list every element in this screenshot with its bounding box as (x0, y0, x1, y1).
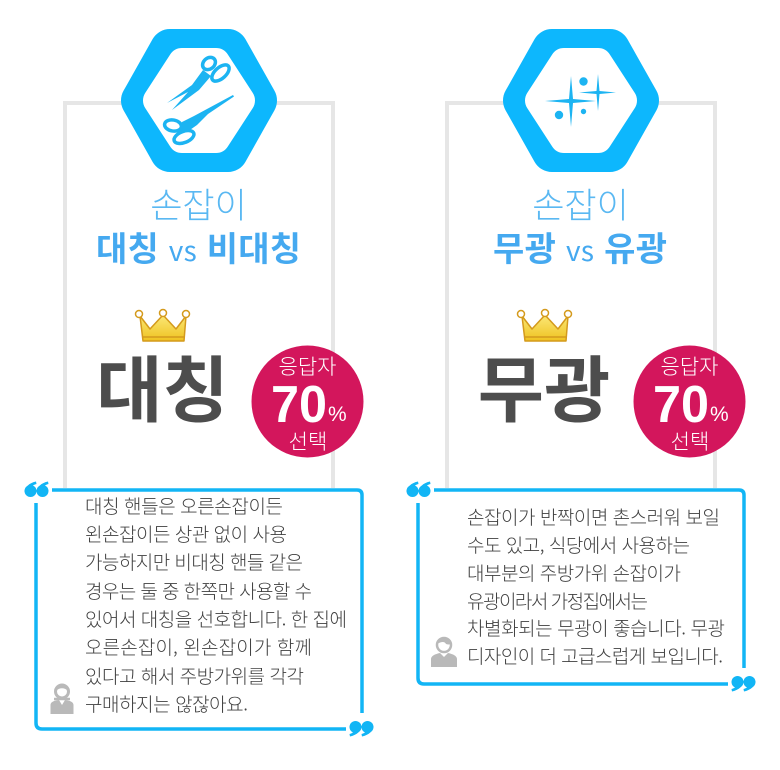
badge: 70 percent: 70 (653, 376, 709, 434)
icon: woman respondent (50, 685, 74, 714)
quote box (24, 482, 374, 736)
winner: symmetric: 대칭 (96, 332, 229, 437)
quote mark: open (406, 482, 430, 497)
panel: handle matte vs glossy (406, 49, 756, 692)
quote text: 경우는 둘 중 한쪽만 사용할 수 (85, 577, 312, 604)
quote text: 있다고 해서 주방가위를 각각 (85, 662, 304, 689)
quote text: 오른손잡이, 왼손잡이가 함께 (85, 633, 312, 660)
quote text: 가능하지만 비대칭 핸들 같은 (85, 548, 303, 575)
quote text: 차별화되는 무광이 좋습니다. 무광 (467, 614, 725, 641)
badge: 70 percent: 70 (271, 376, 327, 434)
quote text: 있어서 대칭을 선호합니다. 한 집에 (85, 605, 347, 632)
quote text: 손잡이가 반짝이면 촌스러워 보일 (467, 503, 720, 530)
quote text: 대칭 핸들은 오른손잡이든 (85, 492, 283, 519)
panel: handle symmetric vs asymmetric (24, 49, 374, 736)
icon: man respondent (431, 638, 457, 667)
quote text (467, 503, 725, 669)
quote mark: close (350, 721, 374, 736)
quote box (406, 482, 756, 692)
badge: 70 percent: 선택 (671, 426, 709, 456)
icon: crown (518, 310, 572, 341)
quote text (85, 492, 347, 717)
badge: 70 percent: % (710, 403, 729, 426)
card outline (447, 103, 715, 488)
quote text: 유광이라서 가정집에서는 (467, 587, 648, 614)
quote text: 디자인이 더 고급스럽게 보입니다. (467, 642, 723, 669)
badge: 70 percent (252, 346, 364, 458)
card outline (65, 103, 333, 488)
badge: 70 percent: 선택 (289, 426, 327, 456)
icon: crown (136, 310, 190, 341)
icon: hexagon with scissors (141, 49, 257, 152)
quote text: 왼손잡이든 상관 없이 사용 (85, 520, 287, 547)
quote mark: close (732, 676, 756, 692)
quote text: 대부분의 주방가위 손잡이가 (467, 559, 681, 586)
badge: 70 percent: 응답자 (279, 351, 336, 381)
quote mark: open (24, 482, 48, 497)
heading: handle: 손잡이 (150, 178, 247, 229)
heading: handle: 손잡이 (532, 178, 629, 229)
icon: hexagon with sparkles (523, 49, 639, 152)
quote text: 수도 있고, 식당에서 사용하는 (467, 531, 690, 558)
badge: 70 percent (634, 346, 746, 458)
heading: matte vs glossy: 무광 vs 유광 (493, 222, 667, 271)
heading: symmetric vs asymmetric: 대칭 vs 비대칭 (96, 222, 301, 271)
winner: matte: 무광 (478, 332, 610, 437)
quote text: 구매하지는 않잖아요. (85, 690, 248, 717)
badge: 70 percent: 응답자 (661, 351, 718, 381)
badge: 70 percent: % (328, 403, 347, 426)
